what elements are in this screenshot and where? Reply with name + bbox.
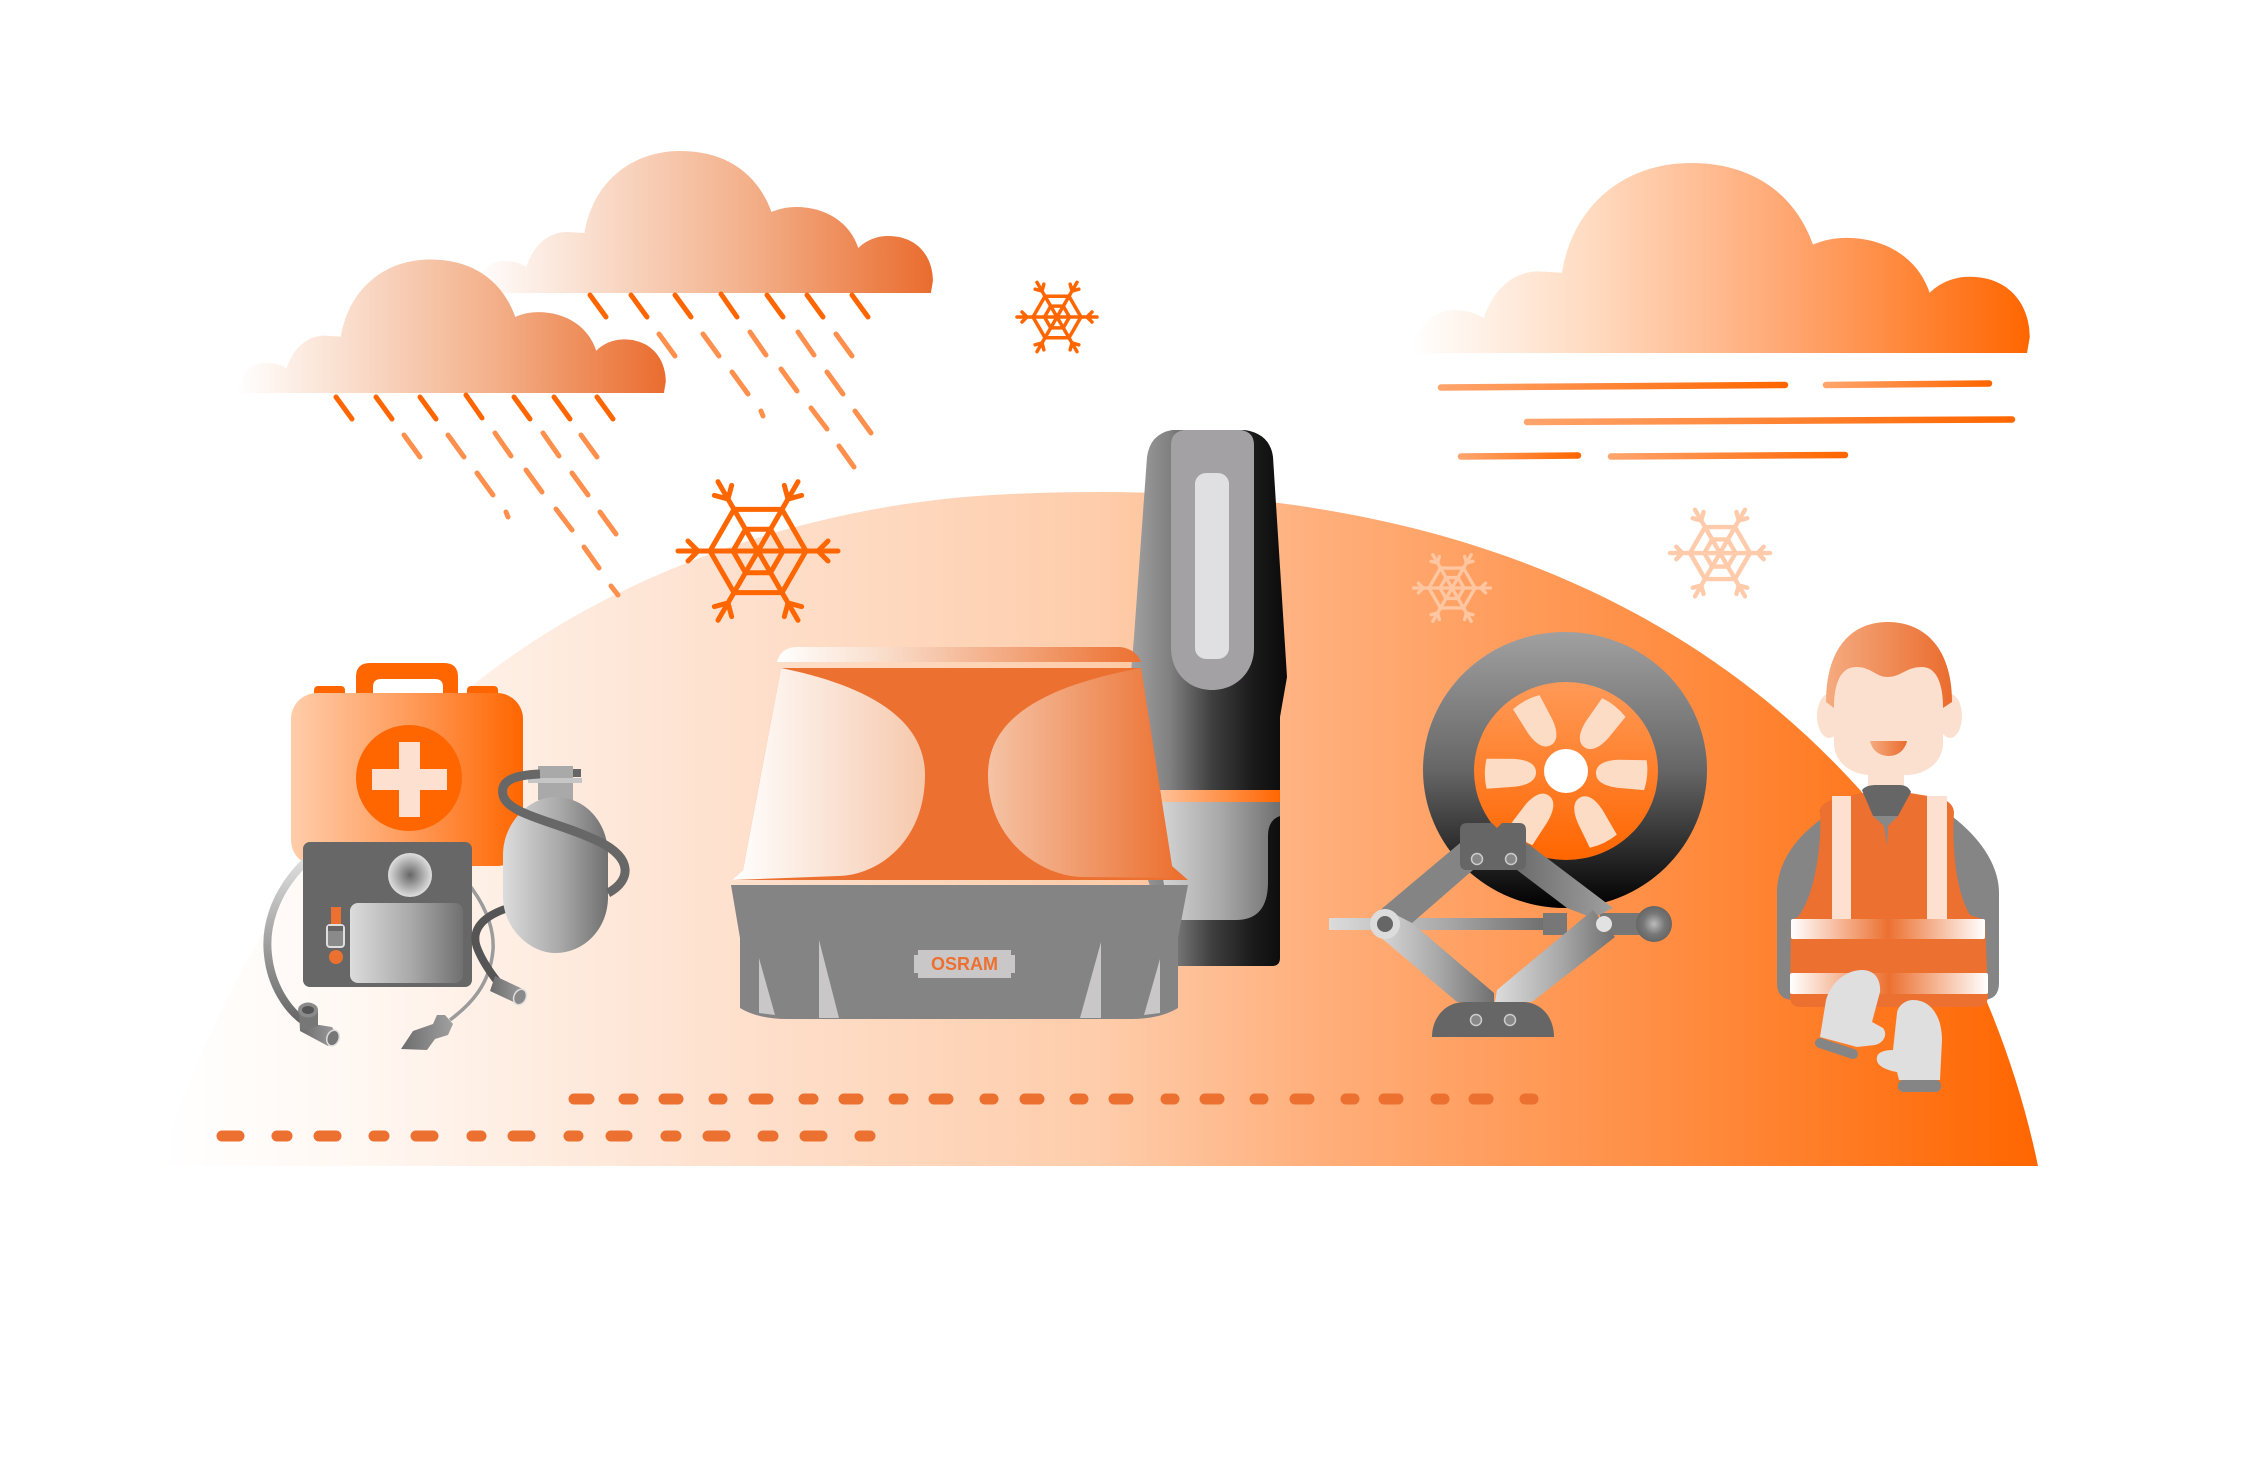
back cloud (472, 151, 933, 293)
air compressor (267, 842, 529, 1050)
wind lines (1441, 384, 2012, 456)
worker face (1834, 667, 1943, 775)
torch orange stripe (1150, 790, 1280, 802)
torch body (1120, 430, 1287, 966)
T connector (298, 1002, 341, 1048)
beacon left lens (732, 668, 925, 880)
hi-vis vest (1790, 793, 1988, 1007)
compressor body (303, 842, 472, 987)
gauge (388, 853, 432, 897)
snowflake: pale on white (1670, 507, 1770, 599)
jack upper arms (1372, 843, 1613, 940)
snowflake: large (678, 477, 838, 625)
background hill (159, 492, 2038, 1166)
worker ears (1817, 694, 1962, 738)
compressor right hose (450, 886, 493, 1020)
worker hair (1826, 622, 1952, 708)
beacon top cap (777, 647, 1141, 662)
worker neck (1868, 765, 1904, 795)
jack handle ball (1636, 906, 1672, 942)
dark hose (475, 909, 505, 981)
worker collar (1862, 785, 1911, 816)
wheel spokes (1484, 693, 1648, 850)
OSRAM badge: OSRAM (931, 954, 998, 974)
worker shirt V (1873, 816, 1898, 846)
front cloud (236, 260, 666, 393)
left mitten (1820, 970, 1885, 1054)
beacon base (731, 885, 1188, 1019)
front cloud rain (336, 395, 618, 595)
back cloud rain (590, 294, 871, 467)
torch LED strip (1195, 473, 1229, 659)
worker (1777, 622, 1999, 1092)
jack lower left arm (1372, 909, 1494, 1002)
road dashes: upper row (574, 1094, 1533, 1104)
worker torso and arms (1777, 817, 1999, 1000)
spare wheel (1423, 632, 1707, 908)
right cloud (1411, 163, 2030, 353)
jack screw rod (1329, 918, 1543, 930)
power switch (327, 907, 344, 964)
torch lower grip (1150, 802, 1280, 920)
scissor jack (1329, 823, 1672, 1037)
worker mouth (1870, 741, 1907, 756)
nozzle (401, 1015, 453, 1050)
beacon base highlights (759, 940, 1160, 1018)
snowflake: small top (1017, 280, 1097, 354)
hose coupling (490, 976, 529, 1007)
beacon light (731, 647, 1188, 1019)
work torch (1120, 430, 1287, 966)
jack lower right arm (1495, 910, 1615, 1002)
gas bottle (503, 766, 625, 953)
compressor panel (350, 903, 463, 983)
first aid kit (291, 663, 523, 866)
OSRAM badge (914, 950, 1015, 978)
jack pivots (1370, 909, 1612, 939)
compressor left hose (267, 862, 305, 1022)
beacon right lens (988, 668, 1178, 878)
jack base (1432, 1002, 1554, 1037)
snowflake: pale on hill (1414, 552, 1490, 624)
beacon dome (732, 668, 1188, 880)
jack top mount (1460, 823, 1526, 870)
right mitten (1877, 1000, 1942, 1092)
road dashes: lower row (222, 1130, 870, 1142)
torch front panel (1171, 430, 1254, 690)
